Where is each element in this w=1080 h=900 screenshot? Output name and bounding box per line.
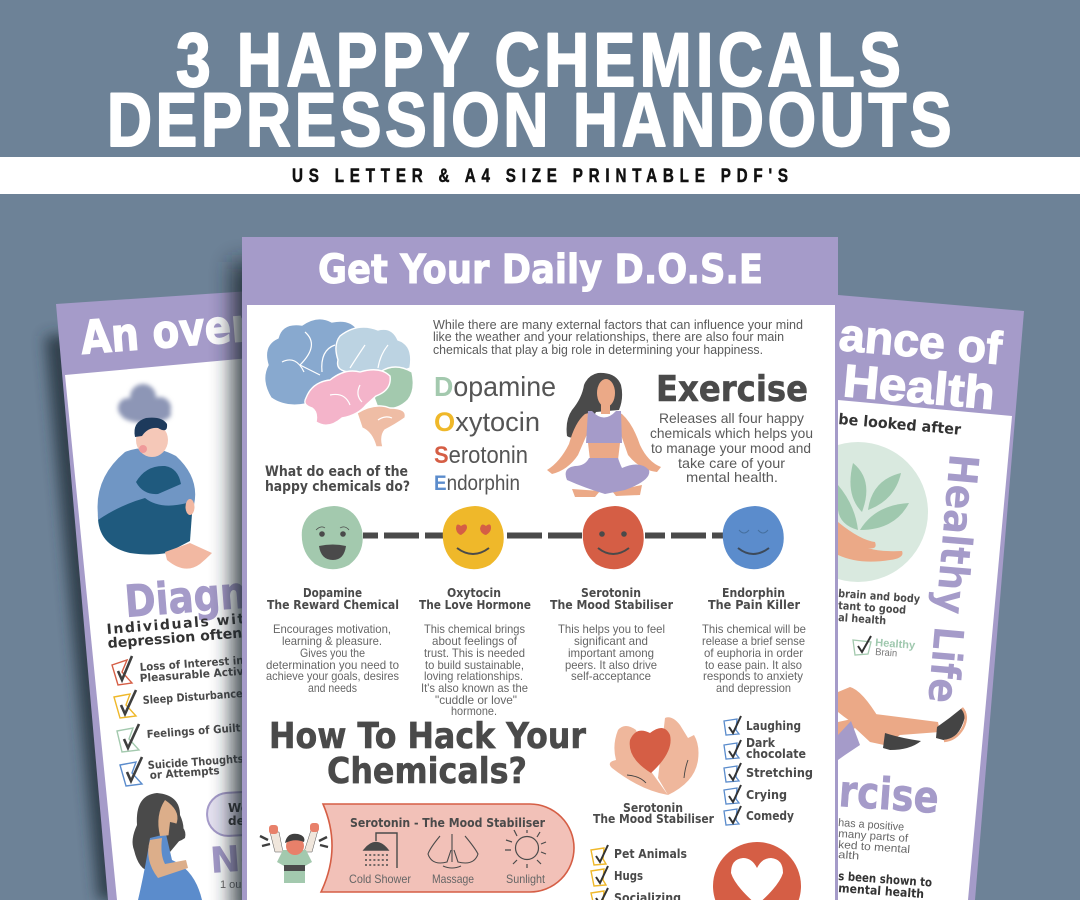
icon labels: Massage [432, 872, 474, 886]
intro text: like the weather and your relationships, there are also four main [433, 329, 784, 344]
dopamine label [267, 586, 399, 612]
serotonin description: important among [568, 646, 654, 660]
endorphin label: Endorphin [722, 586, 785, 600]
right page bold text: s been shown to [838, 869, 933, 890]
main title: 3 HAPPY CHEMICALS [176, 17, 901, 102]
serotonin description: self-acceptance [571, 669, 651, 683]
endorphin description: to ease pain. It also [705, 658, 802, 672]
dopamine description: Gives you the [300, 646, 365, 660]
panel: left page [56, 292, 242, 900]
serotonin label: The Mood Stabiliser [550, 598, 673, 612]
icon: heart circle [713, 842, 801, 900]
oxytocin label: Oxytocin [447, 586, 501, 600]
icon labels: Sunlight [506, 872, 546, 886]
panel: centre page [242, 237, 838, 900]
check: dark chocolate: chocolate [746, 747, 806, 761]
oxytocin: Oxytocin [434, 407, 540, 437]
text: brain and body: brain and body [838, 587, 920, 606]
right page heading: Health [841, 354, 997, 419]
face: dopamine [302, 506, 363, 569]
dopamine description [266, 622, 399, 695]
oxytocin description: loving relationships. [424, 669, 523, 683]
heading: how to hack: How To Hack Your [269, 716, 586, 757]
illustration: pregnant woman [133, 793, 202, 900]
stat caption: 1 ou [220, 879, 241, 891]
exercise text: to manage your mood and [651, 440, 811, 456]
shadow behind left page [45, 325, 200, 900]
checkbox: healthy brain: Brain [875, 647, 898, 660]
serotonin label: Serotonin [581, 586, 641, 600]
callout: pill: de [228, 814, 245, 828]
question heading: What do each of the [265, 464, 408, 480]
icon labels [349, 872, 546, 886]
hands label: The Mood Stabiliser [593, 812, 714, 826]
check: hugs: Hugs [614, 869, 643, 883]
check: feelings of guilt: Feelings of Guilt [146, 721, 241, 741]
checkbox: healthy brain: Healthy [875, 637, 916, 652]
check: pet animals: Pet Animals [614, 847, 687, 861]
column: endorphin [702, 586, 806, 695]
dopamine description: achieve your goals, desires [266, 669, 399, 683]
right page body text: alth [838, 849, 860, 862]
text: individuals with depression: Individuals wit [106, 611, 245, 638]
intro text: While there are many external factors that can influence your mind [433, 317, 803, 332]
icon: shower [364, 833, 397, 868]
serotonin: Serotonin [434, 442, 528, 469]
question heading: happy chemicals do? [265, 479, 410, 495]
illustration: meditating woman [547, 373, 661, 497]
check: sleep disturbance: Sleep Disturbance [142, 687, 243, 707]
endorphin description: release a brief sense [702, 634, 805, 648]
endorphin description: This chemical will be [702, 622, 806, 636]
check: loss of interest [112, 654, 245, 685]
subtitle band: US LETTER & A4 SIZE PRINTABLE PDF'S [292, 164, 788, 186]
exercise text: take care of your [678, 455, 785, 471]
check: suicide thoughts: Suicide Thoughts [147, 752, 244, 772]
heading: exercise: Exercise [656, 369, 808, 410]
dopamine label: Dopamine [303, 586, 362, 600]
illustration: brain [265, 319, 413, 447]
right page heading [837, 308, 1005, 419]
dopamine description: learning & pleasure. [282, 634, 382, 648]
column: serotonin [550, 586, 673, 683]
serotonin description: significant and [574, 634, 648, 648]
icon: massage hands [428, 834, 478, 868]
shadow cast by centre page [232, 262, 272, 900]
right page body text: ked to mental [838, 839, 910, 856]
illustration: legs with shoes [838, 687, 966, 760]
serotonin description: peers. It also drive [565, 658, 657, 672]
oxytocin description: to build sustainable, [425, 658, 524, 672]
stat heading: No [209, 837, 266, 882]
dopamine: Dopamine [434, 371, 556, 402]
check: dark chocolate: Dark [746, 736, 776, 750]
subtitle band [0, 157, 1080, 194]
oxytocin description: hormone. [451, 704, 497, 718]
left page heading: An over [79, 298, 253, 365]
exercise text: Releases all four happy [659, 410, 804, 426]
panel: right page [788, 295, 1024, 900]
text: brain and body [838, 587, 920, 627]
DOSE acronym list [434, 371, 556, 495]
right page subheading: be looked after [838, 410, 962, 439]
check: loss of interest: Loss of Interest in [139, 654, 244, 674]
endorphin label: The Pain Killer [708, 598, 800, 612]
check: laughing: Laughing [746, 719, 801, 733]
hands label [593, 801, 714, 826]
check: stretching: Stretching [746, 766, 813, 780]
icon labels: Cold Shower [349, 872, 411, 886]
oxytocin description: about feelings of [432, 634, 518, 648]
right page body text: has a positive [838, 817, 904, 834]
heading: how to hack [269, 716, 586, 792]
text: individuals with depression: depression often [107, 625, 243, 652]
oxytocin description: This chemical brings [424, 622, 525, 636]
text: individuals with depression [108, 613, 242, 650]
endorphin label [708, 586, 800, 612]
heading: diagnosis: Diagn [123, 568, 248, 628]
endorphin description: of euphoria in order [704, 646, 803, 660]
right page section heading: exercise: rcise [837, 766, 941, 824]
intro text: chemicals that play a big role in determining your happiness. [433, 342, 763, 357]
oxytocin description: It's also known as the [421, 681, 528, 695]
right page body text: many parts of [838, 828, 909, 845]
dopamine description: determination you need to [266, 658, 399, 672]
check: suicide thoughts: or Attempts [149, 764, 220, 782]
checkbox: healthy brain [853, 636, 916, 660]
dashed connector [363, 532, 724, 538]
serotonin description: This helps you to feel [558, 622, 665, 636]
callout: pill: We [228, 801, 249, 815]
oxytocin description: trust. This is needed [424, 646, 525, 660]
endorphin description: and depression [716, 681, 791, 695]
oxytocin description: "cuddle or love" [435, 693, 517, 707]
column: oxytocin [419, 586, 531, 718]
check: crying: Crying [746, 788, 787, 802]
checklist: symptoms [112, 654, 245, 786]
check: loss of interest: Pleasurable Activ [139, 665, 245, 685]
face: endorphin [723, 506, 784, 569]
serotonin description [558, 622, 665, 683]
checklist: endorphin hacks [724, 716, 813, 825]
check: dark chocolate [724, 736, 806, 761]
endorphin: Endorphin [434, 472, 520, 495]
main title [107, 17, 952, 162]
right page heading: ance of [837, 308, 1005, 374]
banner: serotonin hacks [321, 804, 574, 892]
face: serotonin [583, 506, 644, 569]
oxytocin description [421, 622, 528, 718]
exercise text: mental health. [686, 469, 778, 485]
callout: pill [206, 791, 242, 837]
exercise text: chemicals which helps you [650, 425, 813, 441]
icon: hands holding heart [610, 717, 698, 795]
serotonin label [550, 586, 673, 612]
oxytocin label [419, 586, 531, 612]
check: suicide thoughts [120, 752, 244, 786]
centre page title: Get Your Daily D.O.S.E [318, 247, 763, 293]
vertical title: healthy life: Healthy Life [918, 452, 988, 705]
dopamine description: Encourages motivation, [273, 622, 391, 636]
face: oxytocin [443, 506, 504, 569]
check: comedy: Comedy [746, 809, 794, 823]
icon: sun [505, 830, 546, 868]
text: brain and body: al health [838, 611, 887, 627]
icon: plant in hand [788, 442, 928, 582]
right page bold text [838, 869, 933, 900]
endorphin description [702, 622, 806, 695]
dopamine label: The Reward Chemical [267, 598, 399, 612]
illustration: cheering boy [260, 823, 328, 883]
hands label: Serotonin [623, 801, 683, 815]
main title: DEPRESSION HANDOUTS [107, 77, 952, 162]
dopamine description: and needs [308, 681, 357, 695]
text: brain and body: tant to good [838, 599, 907, 617]
column: dopamine [266, 586, 399, 695]
right page body text [838, 817, 910, 862]
illustration: sad man with cloud [98, 384, 212, 569]
intro text [433, 317, 803, 357]
checklist: oxytocin hacks [591, 845, 687, 900]
endorphin description: responds to anxiety [703, 669, 803, 683]
banner title: Serotonin - The Mood Stabiliser [350, 816, 545, 830]
heading: how to hack: Chemicals? [327, 751, 527, 792]
oxytocin label: The Love Hormone [419, 598, 531, 612]
exercise text [650, 410, 813, 485]
question heading [265, 464, 410, 495]
